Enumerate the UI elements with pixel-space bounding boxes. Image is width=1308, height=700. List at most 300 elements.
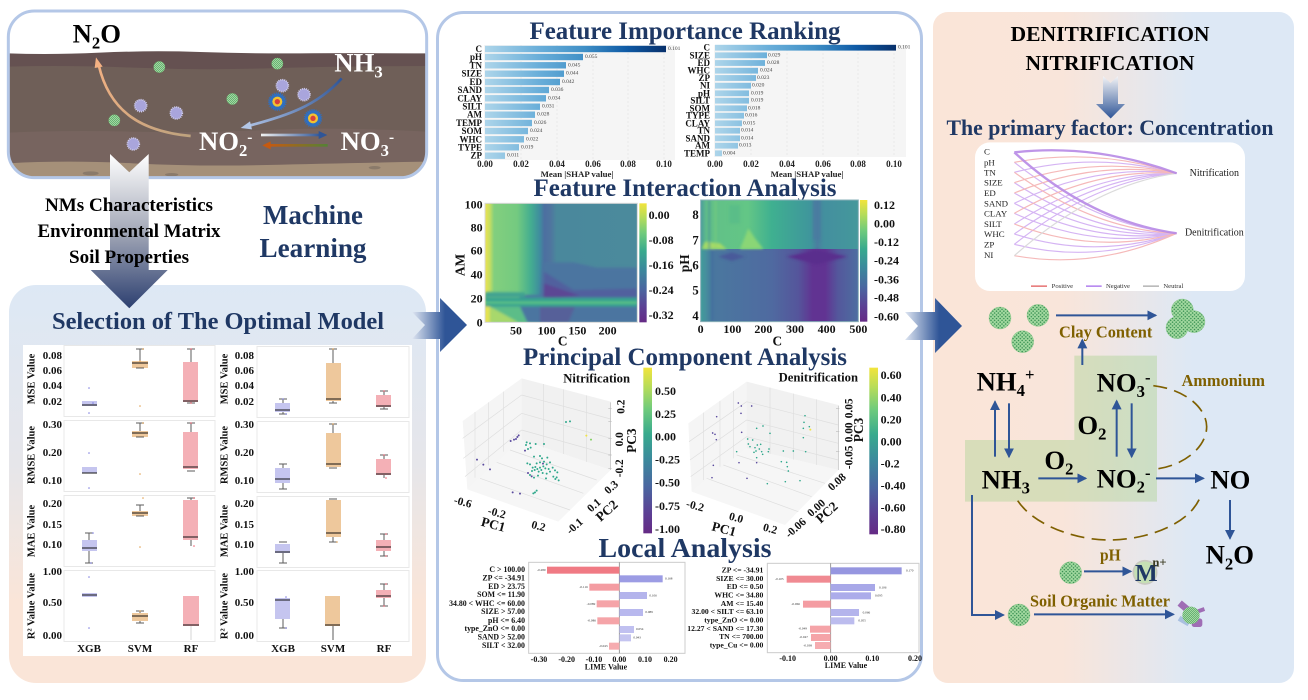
heading: local analysis: Local Analysis <box>598 532 772 563</box>
chemical labels: 2 <box>1098 424 1106 443</box>
arrow: NO2 to NO3 <box>261 131 327 139</box>
chart: LIME local explanation left: 0.043 <box>633 635 641 639</box>
chart: SHAP importance denitrification: SIZE <box>689 50 710 60</box>
chart: PCA 3D scatter nitrification: 0.50 <box>655 384 676 398</box>
chart: PCA 3D scatter denitrification: -0.40 <box>881 479 906 493</box>
chart: interaction heatmap C vs AM: 0.00 <box>649 208 670 222</box>
legend: Negative <box>1106 283 1130 290</box>
x category labels <box>77 643 392 655</box>
y tick labels: 0.20 <box>43 447 62 459</box>
legend: Positive <box>1052 283 1073 290</box>
chart: LIME local explanation right: 0.055 <box>858 619 866 623</box>
chart: interaction heatmap C vs pH: -0.36 <box>874 272 899 286</box>
chart: SHAP importance nitrification <box>456 44 681 179</box>
x category labels: SVM <box>128 643 153 655</box>
y axis titles: RMSE Value <box>220 426 230 484</box>
chart: SHAP importance nitrification: 0.019 <box>521 144 534 150</box>
chart: LIME local explanation left: -0.30 <box>531 655 547 664</box>
chart: interaction heatmap C vs AM: 20 <box>471 291 483 305</box>
chart: LIME local explanation right: SIZE <= 30.00 <box>716 574 763 583</box>
chemical labels <box>977 365 1254 573</box>
chart: PCA 3D scatter nitrification: 0.00 <box>655 429 676 443</box>
chart: SHAP importance nitrification: TYPE <box>458 142 482 152</box>
chart: SHAP importance denitrification: Mean |SHAP value| <box>771 169 843 179</box>
chart: PCA 3D scatter nitrification: 0.2 <box>530 519 547 534</box>
chart: interaction heatmap C vs pH: 6 <box>692 259 699 273</box>
chemical labels: N <box>1206 539 1225 569</box>
chart: SHAP importance denitrification: 0.016 <box>745 113 758 119</box>
chemical labels: 2 <box>1065 459 1073 478</box>
chart: SHAP importance nitrification: 0.042 <box>562 79 575 85</box>
chart: PCA 3D scatter nitrification: 0.25 <box>655 407 676 421</box>
icon: nanoparticle releasing ions: n+ <box>1152 556 1167 570</box>
chart: LIME local explanation left: -0.089 <box>587 602 596 606</box>
panel: analysis column <box>438 12 922 680</box>
boxes: SVM <box>132 361 341 626</box>
icon: nanoparticle releasing ions <box>1060 556 1167 587</box>
chart: LIME local explanation right: 0.10 <box>865 654 879 663</box>
chart: LIME local explanation right: 0.095 <box>875 594 883 598</box>
chart: LIME local explanation right: type_ZnO <= 0.00 <box>704 615 763 624</box>
chart: SHAP importance nitrification: Mean |SHAP value| <box>541 169 613 179</box>
label: NO3-: NO <box>341 126 381 156</box>
chart: LIME local explanation left: LIME Value <box>585 662 628 671</box>
chart: LIME local explanation left <box>449 562 685 671</box>
chart: SHAP importance nitrification: 0.024 <box>530 128 543 134</box>
icon: nanoparticle with organic matter <box>1008 600 1205 627</box>
chart: LIME local explanation left: 34.80 < WHC <= 60.00 <box>449 599 525 608</box>
chart: SHAP importance denitrification: NI <box>700 81 710 91</box>
x category labels: XGB <box>77 643 102 655</box>
chemical labels: 2 <box>1137 478 1145 497</box>
chart: SHAP importance nitrification: CLAY <box>457 93 482 103</box>
chart: PCA 3D scatter denitrification: 0.60 <box>881 368 902 382</box>
chart: PCA 3D scatter denitrification: 0.20 <box>881 413 902 427</box>
chart: SHAP importance denitrification: TYPE <box>686 111 710 121</box>
chemical labels: O <box>1233 539 1254 569</box>
chart: SHAP importance nitrification: 0.036 <box>551 87 564 93</box>
label: NO2-: 2 <box>239 141 247 160</box>
chart: interaction heatmap C vs pH: 300 <box>786 322 804 336</box>
chart: interaction heatmap C vs pH: 0 <box>698 322 704 336</box>
y tick labels: 0.50 <box>43 597 62 609</box>
chart: LIME local explanation left: SILT < 32.00 <box>482 641 525 650</box>
label: N2O: O <box>100 19 121 49</box>
chart: PCA 3D scatter denitrification: PC3 <box>851 417 866 442</box>
chart: LIME local explanation right: -0.049 <box>798 627 807 631</box>
chart: interaction heatmap C vs pH: 0.00 <box>874 216 895 230</box>
y tick labels: 0.00 <box>235 630 254 642</box>
chart: LIME local explanation left: 0.168 <box>665 577 673 581</box>
chart: LIME local explanation left: 0.106 <box>649 593 657 597</box>
chart: SHAP importance nitrification: C <box>476 44 482 54</box>
chart: SHAP importance denitrification: TN <box>697 126 710 136</box>
heading: denitrification nitrification <box>1010 22 1210 75</box>
chemical labels: + <box>1025 365 1034 384</box>
chart: SHAP importance nitrification: 0.10 <box>656 159 672 169</box>
chart: SHAP importance denitrification: 0.00 <box>707 159 723 169</box>
y tick labels: 0.15 <box>235 519 254 531</box>
chart: SHAP importance nitrification: 0.044 <box>566 71 579 77</box>
chart: SHAP importance denitrification: WHC <box>688 66 710 76</box>
chart: PCA 3D scatter denitrification: 0.0 <box>728 511 745 526</box>
chart: interaction heatmap C vs AM: 100 <box>465 197 483 211</box>
chart: interaction heatmap C vs pH: 7 <box>692 234 699 248</box>
chart: PCA 3D scatter denitrification: -0.05 <box>843 445 855 469</box>
y tick labels: 0.15 <box>43 519 62 531</box>
chart: SHAP importance nitrification: WHC <box>460 134 482 144</box>
chart: SHAP importance nitrification: 0.04 <box>549 159 565 169</box>
chart: sankey of feature effects: WHC <box>984 229 1005 239</box>
chart: LIME local explanation right: -0.105 <box>775 577 784 581</box>
chart: LIME local explanation right: -0.047 <box>799 635 808 639</box>
chart: sankey of feature effects: SILT <box>984 219 1002 229</box>
chart: LIME local explanation right: AM <= 15.40 <box>721 599 763 608</box>
y tick labels: 0.02 <box>43 396 62 408</box>
chart: interaction heatmap C vs pH: 5 <box>692 284 699 298</box>
icons: purple microbes <box>127 80 310 150</box>
y axis titles: MAE Value <box>26 505 38 557</box>
label: NH3: 3 <box>374 63 383 82</box>
y axis titles: R² Value Value <box>220 573 230 639</box>
outlier dots <box>89 388 286 628</box>
chemical labels: NH <box>977 367 1017 397</box>
chart: PCA 3D scatter nitrification: 0.2 <box>616 399 628 414</box>
chart: sankey of feature effects: pH <box>984 157 995 167</box>
chart: LIME local explanation left: ED > 23.75 <box>488 582 525 591</box>
chart: interaction heatmap C vs AM <box>452 197 674 348</box>
chart: LIME local explanation left: -0.043 <box>599 644 608 648</box>
chart: SHAP importance denitrification: 0.019 <box>751 98 764 104</box>
y axis titles: RMSE Value <box>26 426 38 484</box>
chart: PCA 3D scatter nitrification: 0.1 <box>585 496 604 515</box>
chart: interaction heatmap C vs AM: C <box>558 333 567 348</box>
chart: interaction heatmap C vs AM: AM <box>452 253 467 276</box>
chart: SHAP importance nitrification: ZP <box>470 151 482 161</box>
chart: sankey of feature effects: NI <box>984 250 993 260</box>
arrow: NO2 to N2O <box>95 57 191 136</box>
y axis titles: MSE Value <box>26 353 38 404</box>
chart: interaction heatmap C vs pH <box>677 198 899 348</box>
chart: SHAP importance denitrification: 0.019 <box>751 90 764 96</box>
chart: LIME local explanation right: -0.066 <box>791 602 800 606</box>
y tick labels: 0.10 <box>43 539 62 551</box>
chart: LIME local explanation left: C > 100.00 <box>489 565 525 574</box>
chart: LIME local explanation right: WHC <= 34.80 <box>714 590 764 599</box>
heading: denitrification nitrification: DENITRIFICATION <box>1010 22 1210 46</box>
arrow: NO3 to NO2 <box>262 141 328 149</box>
chart: interaction heatmap C vs pH: 0.12 <box>874 198 895 212</box>
chart: LIME local explanation left: -0.10 <box>586 655 602 664</box>
y tick labels: 0.08 <box>43 350 62 362</box>
chart: SHAP importance denitrification: 0.023 <box>757 75 770 81</box>
panel: mechanism column <box>933 12 1294 683</box>
chart: interaction heatmap C vs AM: -0.32 <box>649 308 674 322</box>
chart: SHAP importance nitrification: 0.031 <box>542 104 555 110</box>
text: input feature categories <box>38 195 221 268</box>
chart: PCA 3D scatter nitrification: -0.75 <box>655 499 680 513</box>
chart: PCA 3D scatter denitrification: -0.2 <box>881 456 900 470</box>
chart: LIME local explanation right: TN <= 700.00 <box>719 632 763 641</box>
chart: SHAP importance nitrification: 0.011 <box>507 153 519 159</box>
medians <box>82 363 391 625</box>
chart: SHAP importance nitrification: SOM <box>461 126 482 136</box>
x category labels: SVM <box>321 643 346 655</box>
chart: sankey of feature effects: CLAY <box>984 208 1008 218</box>
boxes: RF <box>183 362 391 626</box>
chart: SHAP importance denitrification: 0.029 <box>768 52 781 58</box>
chart: SHAP importance denitrification: 0.02 <box>743 159 759 169</box>
chart: SHAP importance denitrification: 0.06 <box>815 159 831 169</box>
chart: LIME local explanation right: 0.170 <box>906 569 914 573</box>
chart: LIME local explanation right: ED <= 0.50 <box>727 582 763 591</box>
chart: interaction heatmap C vs pH: -0.48 <box>874 291 899 305</box>
chart: interaction heatmap C vs AM: -0.16 <box>649 258 674 272</box>
heading: machine learning: Machine <box>263 200 363 230</box>
label: NO2-: NO <box>199 126 239 156</box>
chart: LIME local explanation right: ZP <= -34.91 <box>722 565 763 574</box>
heading: denitrification nitrification: NITRIFICATION <box>1026 51 1195 75</box>
chart: LIME local explanation left: 0.054 <box>636 627 644 631</box>
chart: LIME local explanation left: pH <= 6.40 <box>488 616 525 625</box>
chemical labels: - <box>1145 464 1151 483</box>
gold labels: Ammonium <box>1182 371 1265 390</box>
chart: SHAP importance nitrification: TEMP <box>456 118 483 128</box>
chart: interaction heatmap C vs AM: 100 <box>538 324 556 338</box>
chart: interaction heatmap C vs pH: 100 <box>723 322 741 336</box>
chemical labels: NO <box>1210 464 1250 494</box>
y tick labels: 0.20 <box>235 498 254 510</box>
chart: SHAP importance denitrification: 0.08 <box>850 159 866 169</box>
gold labels: Soil Organic Matter <box>1030 592 1170 611</box>
y tick labels: 0.10 <box>235 539 254 551</box>
dashed curves: ammonium influence <box>1018 386 1207 540</box>
chart: SHAP importance denitrification: 0.024 <box>760 68 773 74</box>
chart: interaction heatmap C vs pH: -0.60 <box>874 309 899 323</box>
chemical labels: 3 <box>1137 382 1145 401</box>
chart: LIME local explanation right: -0.10 <box>779 654 796 663</box>
chart: SHAP importance denitrification: ED <box>697 58 710 68</box>
chart: interaction heatmap C vs pH: -0.12 <box>874 235 899 249</box>
heading: primary factor concentration: The primary factor: Concentration <box>946 116 1274 140</box>
arrow: small gradient down arrow <box>1096 76 1125 118</box>
chart: PCA 3D scatter nitrification: -0.50 <box>655 475 680 489</box>
chart: SHAP importance nitrification: TN <box>469 60 482 70</box>
x category labels: XGB <box>271 643 296 655</box>
chart: PCA 3D scatter nitrification: PC3 <box>624 428 639 453</box>
chart: LIME local explanation left: SOM <= 11.90 <box>477 590 525 599</box>
chart: SHAP importance denitrification: 0.018 <box>748 105 761 111</box>
chart: interaction heatmap C vs pH: pH <box>677 254 692 272</box>
chart: LIME local explanation right <box>687 563 922 670</box>
chart: PCA 3D scatter nitrification: -0.1 <box>564 516 586 537</box>
chart: interaction heatmap C vs AM: -0.24 <box>649 283 674 297</box>
chart: LIME local explanation right: 0.106 <box>879 585 887 589</box>
icons: nanoparticles dispersed <box>989 304 1049 353</box>
chart: PCA 3D scatter nitrification <box>452 368 680 537</box>
y tick labels: 1.00 <box>43 566 62 578</box>
chart: interaction heatmap C vs AM: 0 <box>477 315 483 329</box>
label: N2O: N <box>73 19 92 49</box>
chart: SHAP importance denitrification: C <box>704 43 710 53</box>
arrow: big gradient down arrow <box>91 154 168 308</box>
arrow: analysis to mechanism <box>905 298 962 353</box>
text: input feature categories: Soil Properties <box>69 247 189 268</box>
legend: Neutral <box>1163 283 1183 290</box>
chart: LIME local explanation left: 0.00 <box>612 655 626 664</box>
chart: SHAP importance nitrification: ED <box>469 77 482 87</box>
label: NO3-: 3 <box>381 141 389 160</box>
chart: SHAP importance nitrification: 0.026 <box>534 120 547 126</box>
chart: LIME local explanation left: ZP <= -34.91 <box>482 573 525 582</box>
chart: PCA 3D scatter denitrification <box>685 368 906 541</box>
chart: SHAP importance denitrification: 0.101 <box>898 45 911 51</box>
chart: sankey of feature effects: TN <box>984 167 996 177</box>
chart: SHAP importance denitrification: SOM <box>689 103 710 113</box>
arrows: pathway flows <box>972 315 1230 615</box>
chart: SHAP importance nitrification: SAND <box>457 85 482 95</box>
chart: PCA 3D scatter nitrification: -0.25 <box>655 452 680 466</box>
chemical labels: 2 <box>1225 554 1233 573</box>
chart: SHAP importance nitrification: pH <box>470 52 482 62</box>
chart: SHAP importance denitrification: AM <box>695 141 710 151</box>
chart: SHAP importance denitrification: 0.015 <box>743 120 756 126</box>
chart: LIME local explanation left: -0.20 <box>558 655 575 664</box>
chart: SHAP importance denitrification: 0.014 <box>741 135 754 141</box>
chart: sankey of feature effects: Denitrification <box>1185 227 1244 238</box>
gold labels: pH <box>1100 546 1121 565</box>
heading: machine learning: Learning <box>260 233 367 263</box>
chart: SHAP importance denitrification: pH <box>698 88 710 98</box>
chart: interaction heatmap C vs pH: 8 <box>692 208 699 222</box>
chart: interaction heatmap C vs AM: 80 <box>471 220 483 234</box>
heading: feature importance ranking: Feature Importance Ranking <box>530 18 841 45</box>
y tick labels <box>43 350 254 642</box>
x category labels: RF <box>184 643 199 655</box>
chart: interaction heatmap C vs AM: 200 <box>599 324 617 338</box>
chart: PCA 3D scatter denitrification: -0.60 <box>881 501 906 515</box>
chart: LIME local explanation right: 0.20 <box>908 654 922 663</box>
y tick labels: 0.30 <box>43 419 62 431</box>
chart: SHAP importance nitrification: SILT <box>462 102 482 112</box>
chemical labels: NH <box>982 464 1022 494</box>
chart: interaction heatmap C vs pH: -0.24 <box>874 254 899 268</box>
chemical labels: - <box>1145 368 1151 387</box>
arrow: NH3 to NO2 <box>241 78 342 129</box>
heading: selection of the optimal model: Selection of The Optimal Model <box>52 308 384 335</box>
chart: PCA 3D scatter nitrification: -0.2 <box>486 505 507 522</box>
chemical labels: O <box>1044 445 1065 475</box>
y tick labels: 0.50 <box>235 597 254 609</box>
chart: interaction heatmap C vs pH: C <box>773 333 782 348</box>
chart: interaction heatmap C vs pH: 200 <box>754 322 772 336</box>
chart: sankey of feature effects: SAND <box>984 198 1009 208</box>
chart: SHAP importance nitrification: 0.022 <box>526 136 539 142</box>
gold labels: Clay Content <box>1059 322 1153 341</box>
chart: SHAP importance nitrification: 0.028 <box>537 112 550 118</box>
chart: SHAP importance nitrification: AM <box>467 110 482 120</box>
heading: principal component analysis: Principal Component Analysis <box>523 344 847 371</box>
y axis titles: R² Value Value <box>26 573 38 639</box>
chemical labels: NO <box>1097 463 1137 493</box>
y tick labels: 0.04 <box>235 380 254 392</box>
chart: interaction heatmap C vs pH: 400 <box>818 322 836 336</box>
chart: SHAP importance denitrification: 0.013 <box>739 143 752 149</box>
chart: PCA 3D scatter denitrification: -0.2 <box>685 498 706 515</box>
chart: SHAP importance nitrification: 0.00 <box>477 159 493 169</box>
chart: sankey of feature effects: SIZE <box>984 178 1003 188</box>
icons: rainbow microbes <box>269 94 321 126</box>
chart: LIME local explanation left: type_ZnO <= 0.00 <box>465 624 525 633</box>
chart: SHAP importance nitrification: 0.045 <box>568 62 581 68</box>
chart: SHAP importance nitrification: 0.101 <box>668 46 681 52</box>
chart: LIME local explanation left: -0.086 <box>587 619 596 623</box>
x category labels: RF <box>377 643 392 655</box>
y tick labels: 0.20 <box>235 447 254 459</box>
chart: PCA 3D scatter nitrification: 0.0 <box>614 432 626 446</box>
text: input feature categories: Environmental Matrix <box>38 221 221 242</box>
chart: PCA 3D scatter denitrification: 0.05 <box>843 398 855 418</box>
chart: SHAP importance denitrification: CLAY <box>685 118 710 128</box>
chart: PCA 3D scatter denitrification: 0.00 <box>843 422 855 442</box>
heading: feature interaction analysis: Feature Interaction Analysis <box>534 175 837 202</box>
chart: interaction heatmap C vs AM: 50 <box>510 324 522 338</box>
chart: sankey of feature effects: ZP <box>984 239 994 249</box>
chart: SHAP importance denitrification: 0.10 <box>886 159 902 169</box>
chart: PCA 3D scatter denitrification: 0.2 <box>762 522 779 537</box>
boxes: XGB <box>82 401 290 619</box>
chart: SHAP importance nitrification: 0.02 <box>513 159 529 169</box>
chemical labels: 3 <box>1022 479 1030 498</box>
chart: SHAP importance nitrification: 0.06 <box>585 159 601 169</box>
chemical labels: NO <box>1097 368 1137 398</box>
icons: green nanoparticles <box>109 58 283 126</box>
chart: SHAP importance denitrification: SILT <box>690 96 710 106</box>
chart: PCA 3D scatter denitrification: PC2 <box>813 498 841 526</box>
chart: PCA 3D scatter nitrification: -0.6 <box>452 495 473 511</box>
chart: sankey of feature effects: ED <box>984 188 996 198</box>
chart: SHAP importance nitrification: 0.055 <box>585 54 598 60</box>
chart: LIME local explanation right: 32.00 < SILT <= 63.10 <box>692 607 763 616</box>
chart: interaction heatmap C vs AM: 40 <box>471 267 483 281</box>
chart: SHAP importance denitrification: ZP <box>698 73 710 83</box>
chart: LIME local explanation right: 0.066 <box>863 610 870 614</box>
y tick labels: 1.00 <box>235 566 254 578</box>
chart: interaction heatmap C vs AM: 60 <box>471 244 483 258</box>
chart: model comparison box plots <box>23 345 412 656</box>
chart: PCA 3D scatter nitrification: -0.2 <box>614 459 626 477</box>
y axis titles: MAE Value <box>220 505 230 557</box>
chart: SHAP importance denitrification <box>684 43 911 179</box>
y tick labels: 0.10 <box>235 475 254 487</box>
chart: LIME local explanation left: -0.116 <box>579 585 588 589</box>
chart: PCA 3D scatter denitrification: PC1 <box>710 519 738 539</box>
text: input feature categories: NMs Characteristics <box>45 195 213 216</box>
y tick labels: 0.10 <box>43 475 62 487</box>
chart: LIME local explanation left: SIZE > 57.00 <box>481 607 525 616</box>
chart: LIME local explanation right: type_Cu <= 0.00 <box>710 640 763 649</box>
chart: SHAP importance denitrification: 0.004 <box>723 150 736 156</box>
y tick labels: 0.00 <box>43 630 62 642</box>
chart: sankey of feature effects <box>975 142 1245 291</box>
chart: PCA 3D scatter denitrification: 0.08 <box>826 471 849 493</box>
chart: sankey of feature effects: C <box>984 147 990 157</box>
y axis titles: MSE Value <box>220 353 230 404</box>
label: NO2-: - <box>247 129 252 146</box>
chemical labels: 4 <box>1017 381 1026 400</box>
y tick labels: 0.30 <box>235 419 254 431</box>
chart: PCA 3D scatter denitrification: 0.40 <box>881 390 902 404</box>
